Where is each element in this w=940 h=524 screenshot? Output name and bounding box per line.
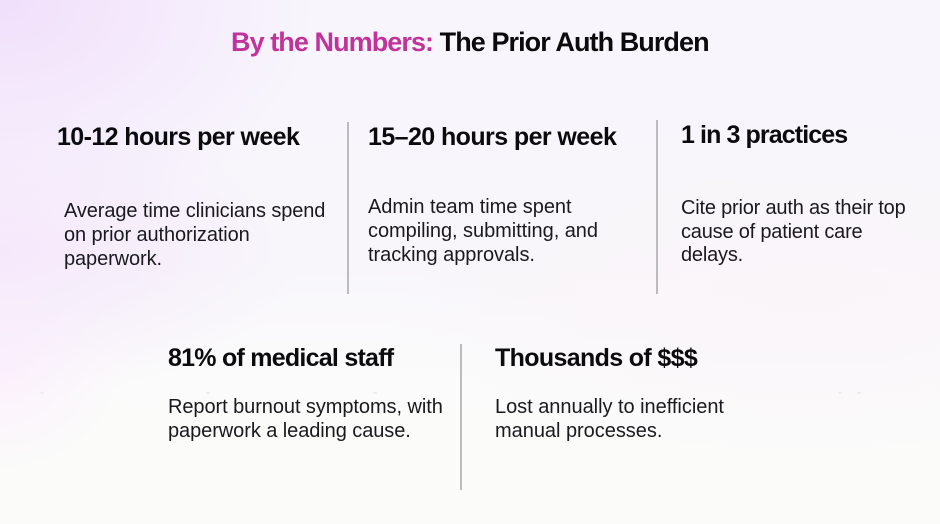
description: manual processes. — [495, 420, 662, 442]
heading: 10-12 hours per week — [57, 123, 299, 151]
description: Report burnout symptoms, with — [168, 396, 443, 418]
stat: 1 in 3 practices — [681, 121, 906, 266]
divider — [347, 122, 349, 294]
description: paperwork. — [64, 248, 162, 270]
description: cause of patient care — [681, 220, 862, 242]
description — [64, 200, 325, 270]
description: paperwork a leading cause. — [168, 420, 411, 442]
stat: 15-20 hours per week — [368, 123, 617, 266]
description: Average time clinicians spend — [64, 200, 325, 222]
divider — [460, 344, 462, 490]
title: By the Numbers: The Prior Auth Burden — [231, 27, 709, 57]
stat: 81% of medical staff — [168, 344, 443, 442]
heading: 1 in 3 practices — [681, 121, 847, 149]
description: tracking approvals. — [368, 244, 535, 266]
heading: 15–20 hours per week — [368, 123, 616, 151]
description: Lost annually to inefficient — [495, 396, 724, 418]
description: compiling, submitting, and — [368, 220, 598, 242]
description: delays. — [681, 244, 743, 266]
heading: Thousands of $$$ — [495, 344, 697, 372]
description: on prior authorization — [64, 224, 250, 246]
stat: 10-12 hours per week — [57, 123, 325, 270]
description: Cite prior auth as their top — [681, 197, 906, 219]
description — [681, 197, 906, 266]
stat: Thousands of $$$ — [495, 344, 724, 442]
heading: 81% of medical staff — [168, 344, 393, 372]
description — [495, 396, 724, 442]
description — [168, 396, 443, 442]
description: Admin team time spent — [368, 196, 571, 218]
description — [368, 196, 598, 266]
divider — [656, 120, 658, 294]
